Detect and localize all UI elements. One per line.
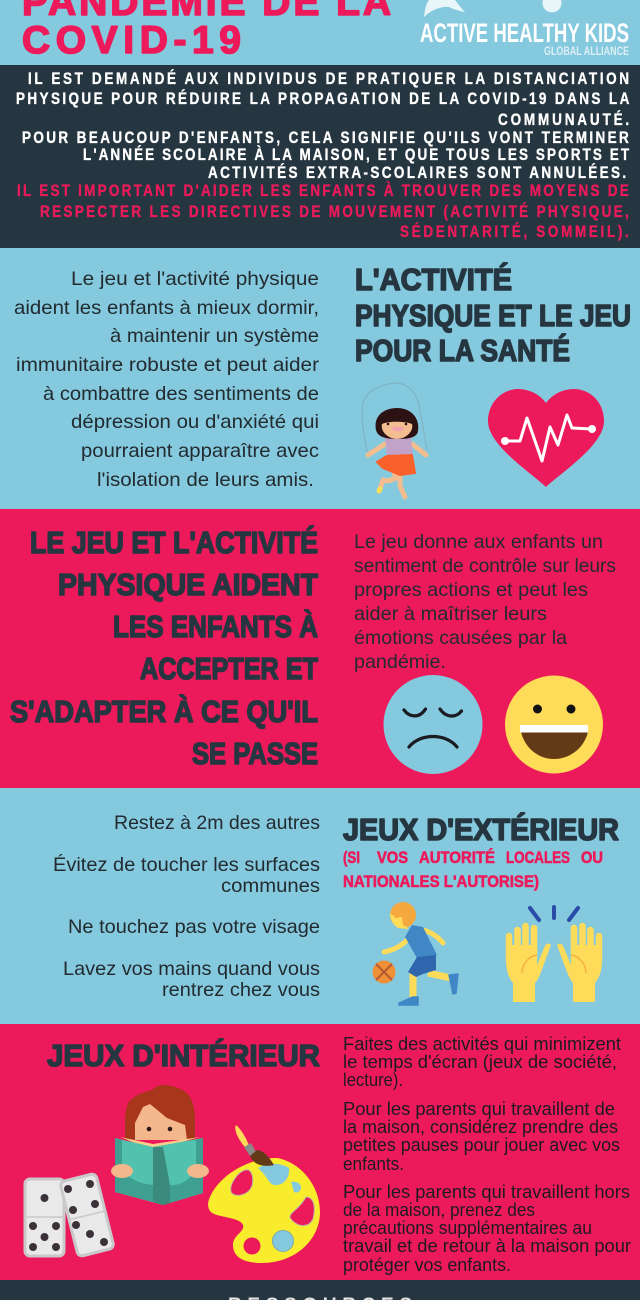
panel: health	[0, 248, 640, 509]
text block: indoor advice: lecture).	[343, 1070, 403, 1090]
panel: emotions	[0, 509, 640, 788]
text block: white introduction: L'ANNÉE SCOLAIRE À LA MAISON, ET QUE TOUS LES SPORTS ET	[83, 146, 630, 164]
heading: health: L'ACTIVITÉ	[355, 262, 512, 297]
text block: indoor advice: petites pauses pour jouer avec vos	[343, 1135, 620, 1155]
text block: pink introduction: IL EST IMPORTANT D'AIDER LES ENFANTS À TROUVER DES MOYENS DE	[17, 182, 629, 200]
text block: white introduction	[16, 70, 630, 182]
heading: emotions	[10, 525, 318, 771]
text block: indoor advice: précautions supplémentaires au	[343, 1218, 592, 1238]
note: local authorities: AUTORITÉ	[419, 848, 495, 867]
icon: raised hands	[506, 907, 602, 1002]
text block: pink introduction: RESPECTER LES DIRECTIVES DE MOUVEMENT (ACTIVITÉ PHYSIQUE,	[40, 203, 629, 221]
text block: health benefits	[14, 268, 320, 491]
text block: health benefits: immunitaire robuste et peut aider	[16, 354, 320, 376]
text block: indoor advice	[343, 1034, 631, 1275]
text block: pink introduction: SÉDENTARITÉ, SOMMEIL).	[400, 223, 629, 241]
icon: laughing face	[505, 676, 603, 774]
note: local authorities: LOCALES	[506, 849, 570, 867]
text block: sense of control: aider à maîtriser leurs	[354, 603, 547, 625]
panel: indoor play	[0, 1024, 640, 1280]
icon: child reading a book	[111, 1085, 209, 1205]
panel: introduction	[0, 65, 640, 248]
text block: indoor advice: la maison, considérez prendre des	[343, 1117, 618, 1137]
text block: outdoor rules: Évitez de toucher les surfaces	[53, 853, 320, 876]
text block: indoor advice: de la maison, prenez des	[343, 1200, 535, 1220]
text block: indoor advice: Pour les parents qui travaillent de	[343, 1099, 615, 1119]
title	[22, 0, 391, 62]
text block: sense of control: sentiment de contrôle sur leurs	[354, 555, 616, 577]
heading: outdoor play: JEUX D'EXTÉRIEUR	[343, 812, 619, 847]
note: local authorities: OU	[581, 849, 603, 867]
text block: outdoor rules	[53, 812, 320, 1001]
text block: health benefits: à combattre des sentiments de	[43, 383, 319, 405]
logo: Active Healthy Kids	[420, 0, 629, 58]
note: local authorities: VOS	[377, 849, 408, 867]
icon: heart with pulse	[488, 389, 604, 487]
text block: white introduction: POUR BEAUCOUP D'ENFANTS, CELA SIGNIFIE QU'ILS VONT TERMINER	[22, 129, 629, 147]
text block: indoor advice: le temps d'écran (jeux de société,	[343, 1052, 617, 1072]
heading: indoor play: JEUX D'INTÉRIEUR	[47, 1038, 320, 1073]
text block: sense of control: émotions causées par la	[354, 627, 567, 649]
text block: outdoor rules: Restez à 2m des autres	[114, 812, 320, 834]
text block: health benefits: Le jeu et l'activité physique	[71, 268, 319, 290]
text block: indoor advice: Pour les parents qui travaillent hors	[343, 1182, 630, 1202]
text block: health benefits: dépression ou d'anxiété qui	[71, 411, 319, 433]
text block: white introduction: PHYSIQUE POUR RÉDUIRE LA PROPAGATION DE LA COVID-19 DANS LA	[16, 90, 629, 108]
text block: indoor advice: Faites des activités qui minimizent	[343, 1034, 621, 1054]
icon: boy dribbling a ball	[372, 902, 458, 1005]
text block: indoor advice: protéger vos enfants.	[343, 1255, 511, 1275]
text block: white introduction: COMMUNAUTÉ.	[498, 111, 629, 129]
text block: health benefits: aident les enfants à mieux dormir,	[14, 297, 319, 319]
text block: sense of control: Le jeu donne aux enfants un	[354, 531, 603, 553]
text block: pink introduction	[17, 182, 629, 241]
text block: indoor advice: enfants.	[343, 1154, 404, 1174]
text block: health benefits: à maintenir un système	[110, 325, 319, 347]
heading: health: POUR LA SANTÉ	[355, 333, 570, 368]
heading: emotions: SE PASSE	[192, 736, 318, 771]
text block: outdoor rules: Ne touchez pas votre visage	[68, 916, 320, 938]
icon: paint palette and brush	[208, 1125, 320, 1263]
note: local authorities: NATIONALES L'AUTORISE)	[343, 873, 539, 891]
heading: emotions: S'ADAPTER À CE QU'IL	[10, 694, 318, 729]
heading: emotions: LES ENFANTS À	[113, 609, 318, 644]
text block: sense of control: pandémie.	[354, 651, 446, 673]
text block: health benefits: l'isolation de leurs amis.	[97, 469, 314, 491]
panel: outdoor play	[0, 788, 640, 1024]
icon: sad face	[384, 675, 482, 774]
text block: outdoor rules: communes	[221, 875, 320, 897]
text block: health benefits: pourraient apparaître avec	[81, 440, 319, 462]
heading: health	[355, 262, 631, 368]
text block: outdoor rules: rentrez chez vous	[162, 979, 320, 1001]
text block: sense of control	[354, 531, 616, 673]
icon: girl jumping rope	[362, 383, 427, 497]
panel: resources	[0, 1280, 640, 1300]
icon: dominoes	[25, 1173, 114, 1257]
title: COVID-19	[22, 19, 241, 62]
text block: indoor advice: travail et de retour à la maison pour	[343, 1236, 631, 1256]
text block: white introduction: IL EST DEMANDÉ AUX INDIVIDUS DE PRATIQUER LA DISTANCIATION	[28, 70, 629, 88]
panel: header	[0, 0, 640, 65]
heading: emotions: ACCEPTER ET	[140, 651, 318, 686]
note: local authorities	[343, 848, 603, 891]
text block: white introduction: ACTIVITÉS EXTRA-SCOLAIRES SONT ANNULÉES.	[208, 164, 626, 182]
heading: emotions: LE JEU ET L'ACTIVITÉ	[30, 525, 318, 560]
note: local authorities: (SI	[343, 849, 360, 867]
text block: sense of control: propres actions et peut les	[354, 579, 588, 601]
text block: outdoor rules: Lavez vos mains quand vous	[63, 958, 320, 980]
heading: emotions: PHYSIQUE AIDENT	[58, 567, 318, 602]
